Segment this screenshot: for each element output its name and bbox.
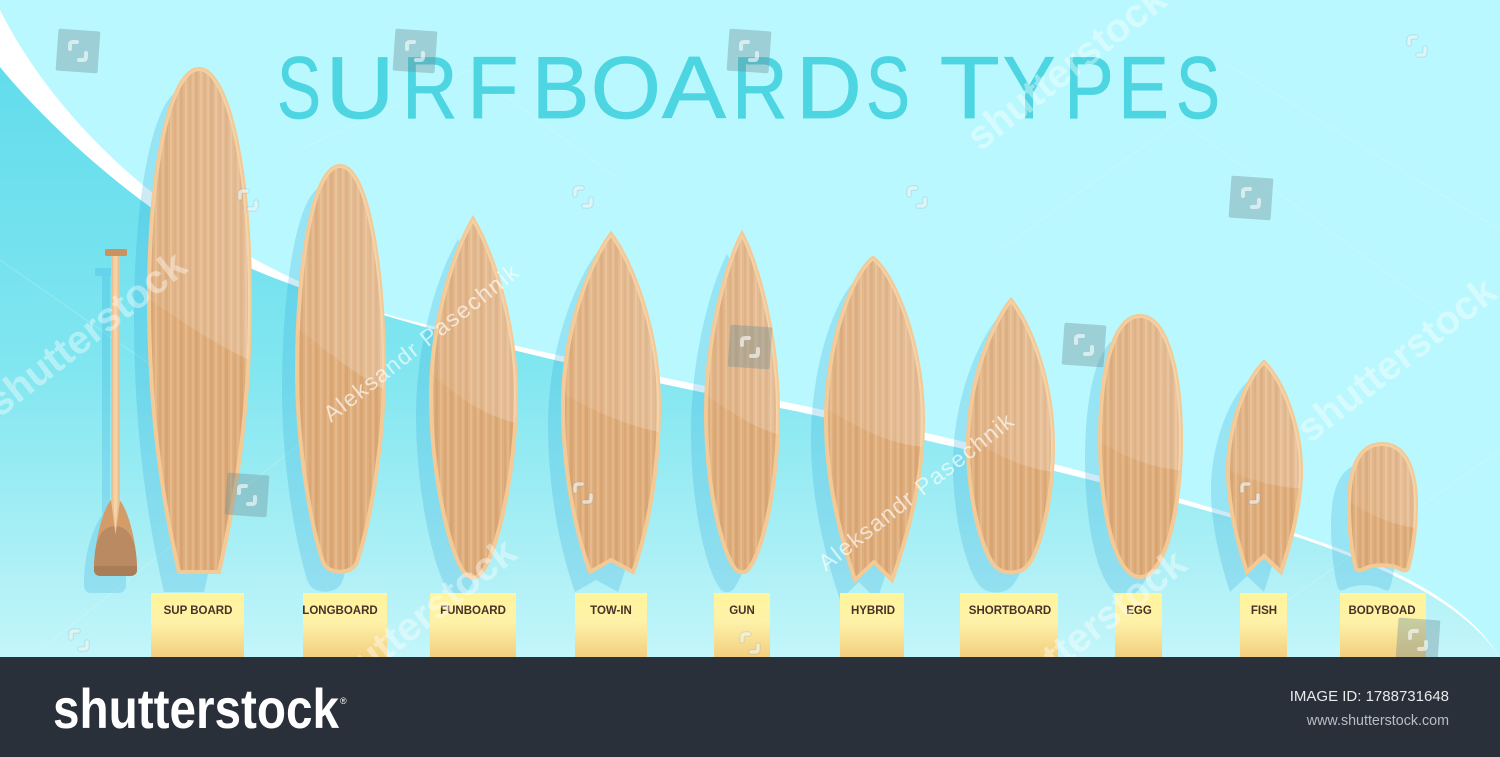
board: funboard <box>416 210 522 598</box>
footer bar <box>0 657 1500 757</box>
title: U <box>326 38 394 137</box>
title: S <box>866 38 910 137</box>
label: bodyboard <box>1340 593 1426 657</box>
label: shortboard: SHORTBOARD <box>969 605 1051 617</box>
label: egg: EGG <box>1126 605 1152 617</box>
watermark: stock image text: shutterstock <box>308 529 525 712</box>
label: shortboard <box>960 593 1058 657</box>
watermark: stock image text: shutterstock <box>978 540 1195 723</box>
board: gun <box>691 230 785 592</box>
title <box>277 38 1220 137</box>
paddle blade <box>94 496 137 576</box>
title: E <box>1118 38 1169 137</box>
title: B <box>532 38 590 137</box>
label: longboard <box>302 593 387 657</box>
label: hybrid <box>840 593 904 657</box>
watermark: stock image text: Aleksandr Pasechnik <box>813 407 1019 576</box>
board: SUP board <box>134 60 260 592</box>
footer registered mark: ® <box>340 696 347 706</box>
title: O <box>591 38 661 137</box>
footer website: www.shutterstock.com <box>1306 713 1449 729</box>
paddle shaft <box>111 256 120 535</box>
label: fish <box>1240 593 1287 657</box>
board: shortboard <box>953 295 1060 592</box>
label: SUP board <box>151 593 244 657</box>
title: Y <box>1003 38 1055 137</box>
paddle handle <box>105 249 127 256</box>
label: longboard: LONGBOARD <box>302 605 378 617</box>
title: T <box>940 38 1000 137</box>
board: bodyboard <box>1331 440 1422 590</box>
label: SUP board: SUP BOARD <box>164 605 232 617</box>
board: tow-in <box>548 230 665 592</box>
title: R <box>402 38 458 137</box>
watermark: stock image text: Aleksandr Pasechnik <box>318 258 524 427</box>
title: R <box>732 38 788 137</box>
title: S <box>277 38 321 137</box>
board: hybrid <box>811 250 928 600</box>
board: egg <box>1085 310 1188 597</box>
icon: paddle <box>84 249 137 593</box>
label: bodyboard: BODYBOAD <box>1348 605 1416 617</box>
watermark: stock image icons <box>56 29 1440 662</box>
watermark: stock image text: shutterstock <box>1288 268 1500 451</box>
footer image id: IMAGE ID: 1788731648 <box>1290 688 1449 705</box>
board: longboard <box>282 160 390 592</box>
title: S <box>1176 38 1220 137</box>
label: tow-in: TOW-IN <box>590 605 632 617</box>
footer logo: shutterstock <box>53 677 340 740</box>
label: gun <box>714 593 770 657</box>
label: hybrid: HYBRID <box>851 605 895 617</box>
label: egg <box>1115 593 1162 657</box>
label: funboard <box>430 593 516 657</box>
label: gun: GUN <box>729 605 755 617</box>
label: funboard: FUNBOARD <box>440 605 506 617</box>
title: A <box>662 38 726 137</box>
title: P <box>1064 38 1114 137</box>
board: fish <box>1211 355 1308 592</box>
label: tow-in <box>575 593 647 657</box>
paddle shadow <box>84 268 126 593</box>
title: F <box>467 38 519 137</box>
faint watermark lines <box>0 60 1500 650</box>
label: fish: FISH <box>1251 605 1277 617</box>
title: D <box>796 38 862 137</box>
